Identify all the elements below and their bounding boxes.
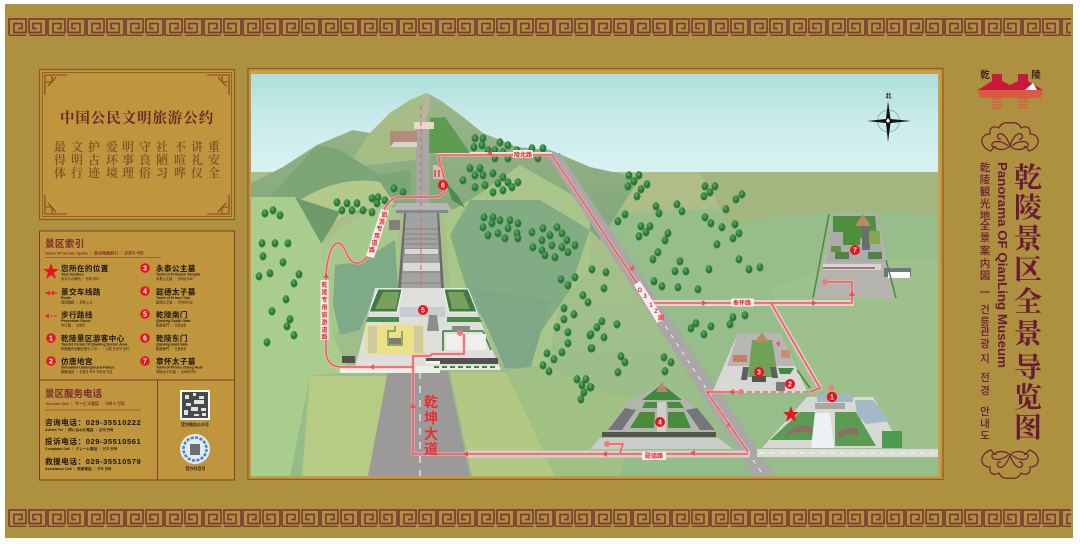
legend: your location	[43, 263, 109, 281]
spot markers	[418, 161, 860, 447]
south gate plaza	[340, 288, 501, 373]
convention body: 体行迹境理俗习哗仪全	[54, 165, 220, 180]
roads	[368, 153, 938, 476]
legend: princess yongtai: 3	[143, 266, 147, 272]
terrain	[251, 93, 938, 476]
legend: prince zhanghuai: 章懐太子の墓 ｜ 장회태자묘	[156, 369, 196, 374]
top key border	[8, 18, 1071, 36]
marker: 6	[438, 180, 448, 190]
legend: your location: Your location	[61, 272, 84, 276]
ornament: top	[982, 123, 1038, 151]
index heading	[45, 238, 161, 258]
compass	[867, 92, 911, 142]
english vertical subtitle: Panorama OF QianLing Museum	[995, 162, 1009, 368]
legend: underground palace: 2	[49, 358, 53, 366]
main vertical title: 乾陵景区全景导览图	[1014, 162, 1043, 444]
site: princess yongtai tomb	[712, 332, 810, 393]
marker: 5	[418, 305, 428, 315]
legend: bus route: 巡回路線 ｜ 운행 노선	[61, 300, 92, 304]
legend: south gate: 5	[143, 312, 147, 318]
convention title: 中国公民文明旅游公约	[60, 109, 214, 127]
legend: east gate: 6	[143, 336, 147, 342]
bottom key border	[8, 509, 1071, 527]
road label: national road: G312国	[638, 288, 664, 322]
marker: 7	[850, 245, 860, 255]
legend: south gate	[140, 309, 191, 328]
marker: 5: 5	[421, 308, 425, 314]
legend: east gate	[140, 333, 188, 351]
phone: complaint	[45, 436, 142, 451]
legend: prince zhanghuai: Tomb of Prince Zhang Huai	[156, 366, 202, 370]
phone: assistance: Assistance Call ｜ 救援電話 ｜ 구조 전화	[45, 466, 112, 471]
legend: tourist center	[46, 333, 129, 351]
legend: tourist center: 乾陵景区游客中心	[61, 333, 125, 343]
phone: complaint: 投诉电话：029-35510561	[45, 436, 142, 446]
phone: advice	[45, 417, 141, 432]
marker: 4: 4	[658, 420, 662, 426]
legend: pedestrian route: 歩行路 ｜ 보행로	[61, 322, 85, 328]
legend: south gate: 乾陵南门	[156, 310, 188, 320]
legend: south gate: 乾陵南門 ｜ 건릉남문	[156, 322, 186, 328]
legend: prince zhanghuai	[140, 356, 202, 374]
legend: prince yide: 懿德太子墓 ｜ 의덕태자묘	[156, 300, 193, 304]
phone: assistance: 救援电话：029-35510579	[45, 456, 141, 466]
legend: underground palace: 仿唐地宫	[61, 356, 93, 366]
legend: underground palace	[46, 356, 114, 374]
logo: 陵	[1031, 69, 1041, 81]
convention body: 得明古环事良陋喧礼安	[54, 152, 221, 167]
legend: prince yide: 懿德太子墓	[156, 286, 196, 296]
legend: east gate: Qianling East Gate	[156, 342, 188, 346]
marker: 6: 6	[441, 182, 445, 190]
road label: left avenue upper	[366, 209, 389, 258]
multi-language vertical subtitle: 乾陵観光地全景案内図一건릉관광지전경안내도	[980, 161, 991, 442]
legend: your location: 您所在的位置	[61, 263, 109, 273]
phone: assistance	[45, 456, 141, 471]
legend: princess yongtai: Tomb of Princess Yongtai	[156, 272, 200, 276]
central sacred way	[389, 93, 470, 302]
phone: advice: Advice Tel ｜ 問い合わせ電話 ｜ 문의 전화	[45, 427, 114, 432]
legend: bus route: 景交车线路	[61, 286, 101, 296]
road label: qiankun avenue: 乾坤大道	[424, 394, 438, 457]
index heading: 景区索引	[45, 238, 85, 250]
route arrows	[323, 150, 855, 457]
legend: your location: あなたの場所 ｜ 현재 위치	[61, 276, 99, 281]
marker: 3	[754, 367, 764, 377]
index heading: Index Of Scenic Spots ｜ 景点地图索引 ｜ 관광지 색인	[46, 250, 144, 256]
panel: scenic index and service phones	[40, 231, 234, 480]
phone: advice: 咨询电话：029-35510222	[45, 417, 141, 427]
legend: prince zhanghuai: 章怀太子墓	[156, 356, 196, 366]
logo: 乾	[980, 69, 990, 81]
panoramic map	[248, 68, 943, 480]
road labels: 奉怀路	[733, 299, 751, 307]
convention body	[54, 139, 221, 180]
sky	[251, 74, 938, 214]
legend: princess yongtai	[140, 263, 200, 281]
forest trees	[256, 134, 763, 404]
road labels: 懿德路	[645, 452, 663, 460]
ornament: bottom	[982, 450, 1038, 478]
legend: prince yide: 4	[143, 288, 147, 296]
legend: prince zhanghuai: 7	[143, 358, 147, 366]
legend: bus route	[45, 286, 101, 304]
logo	[978, 69, 1043, 108]
legend: pedestrian route: 步行路线	[61, 310, 93, 320]
bus stop tags	[437, 161, 834, 447]
your location star	[783, 406, 799, 422]
phone: complaint: Complaint Call ｜ クレーム電話 ｜ 신고 전화	[45, 446, 118, 451]
Douyin badge: 官方抖音号	[186, 465, 206, 471]
site: prince zhanghuai tomb	[813, 214, 911, 298]
QR code: 官方微信公众号	[181, 421, 209, 427]
legend: pedestrian route: Pedestrian Route	[61, 319, 91, 323]
legend: south gate: Qianling South Gate	[156, 319, 191, 323]
marker: 2	[785, 379, 795, 389]
marker: 1: 1	[830, 394, 834, 402]
convention body: 最文护爱明守社不讲重	[54, 139, 220, 154]
legend: tourist center: Tourist Center Of Qianling Scenic Area	[61, 342, 128, 346]
road label: left avenue lower: 乾陵专用旅游道路	[321, 281, 328, 341]
legend: bus route: Route	[61, 296, 71, 300]
legend: east gate: 乾陵东门	[156, 333, 188, 343]
road labels	[320, 150, 754, 460]
service phone heading: Service Call ｜ サービス電話 ｜ 서비스 전화	[46, 400, 125, 406]
marker: 2: 2	[788, 382, 792, 388]
legend: east gate: 乾陵東門 ｜ 건릉동문	[156, 346, 186, 351]
legend: underground palace: 模擬地宮 ｜ 건릉의 모조 지하궁 의궁	[61, 369, 112, 374]
legend: tourist center: 乾陵観光地観光客センター ｜ 건릉 관광객 센터	[61, 346, 129, 351]
marker: 7: 7	[853, 248, 857, 254]
QR code	[180, 390, 210, 427]
road labels: 陵北路	[514, 151, 532, 159]
legend: pedestrian route	[45, 310, 93, 328]
legend: prince yide: Tomb of Prince Yide	[156, 296, 190, 300]
road label: left avenue upper: 旅游专用道路	[369, 211, 388, 254]
site: tourist center	[762, 395, 902, 448]
site: prince yide tomb	[590, 382, 733, 449]
legend: prince yide	[140, 286, 196, 304]
service phone heading: 景区服务电话	[45, 388, 103, 400]
marker: 1	[827, 392, 837, 402]
route lines	[326, 155, 852, 455]
legend: princess yongtai: 永泰公主墓 ｜ 영태공주묘	[156, 276, 193, 281]
legend: princess yongtai: 永泰公主墓	[156, 263, 196, 273]
marker: 3: 3	[757, 370, 761, 376]
compass: 北	[885, 92, 892, 100]
marker: 4	[655, 417, 665, 427]
Douyin badge	[180, 434, 210, 471]
service phone heading	[45, 388, 141, 410]
legend: tourist center: 1	[49, 336, 53, 342]
legend: underground palace: Simulated Underground Palace	[61, 366, 114, 370]
panel: civilized tourism convention	[40, 70, 234, 220]
